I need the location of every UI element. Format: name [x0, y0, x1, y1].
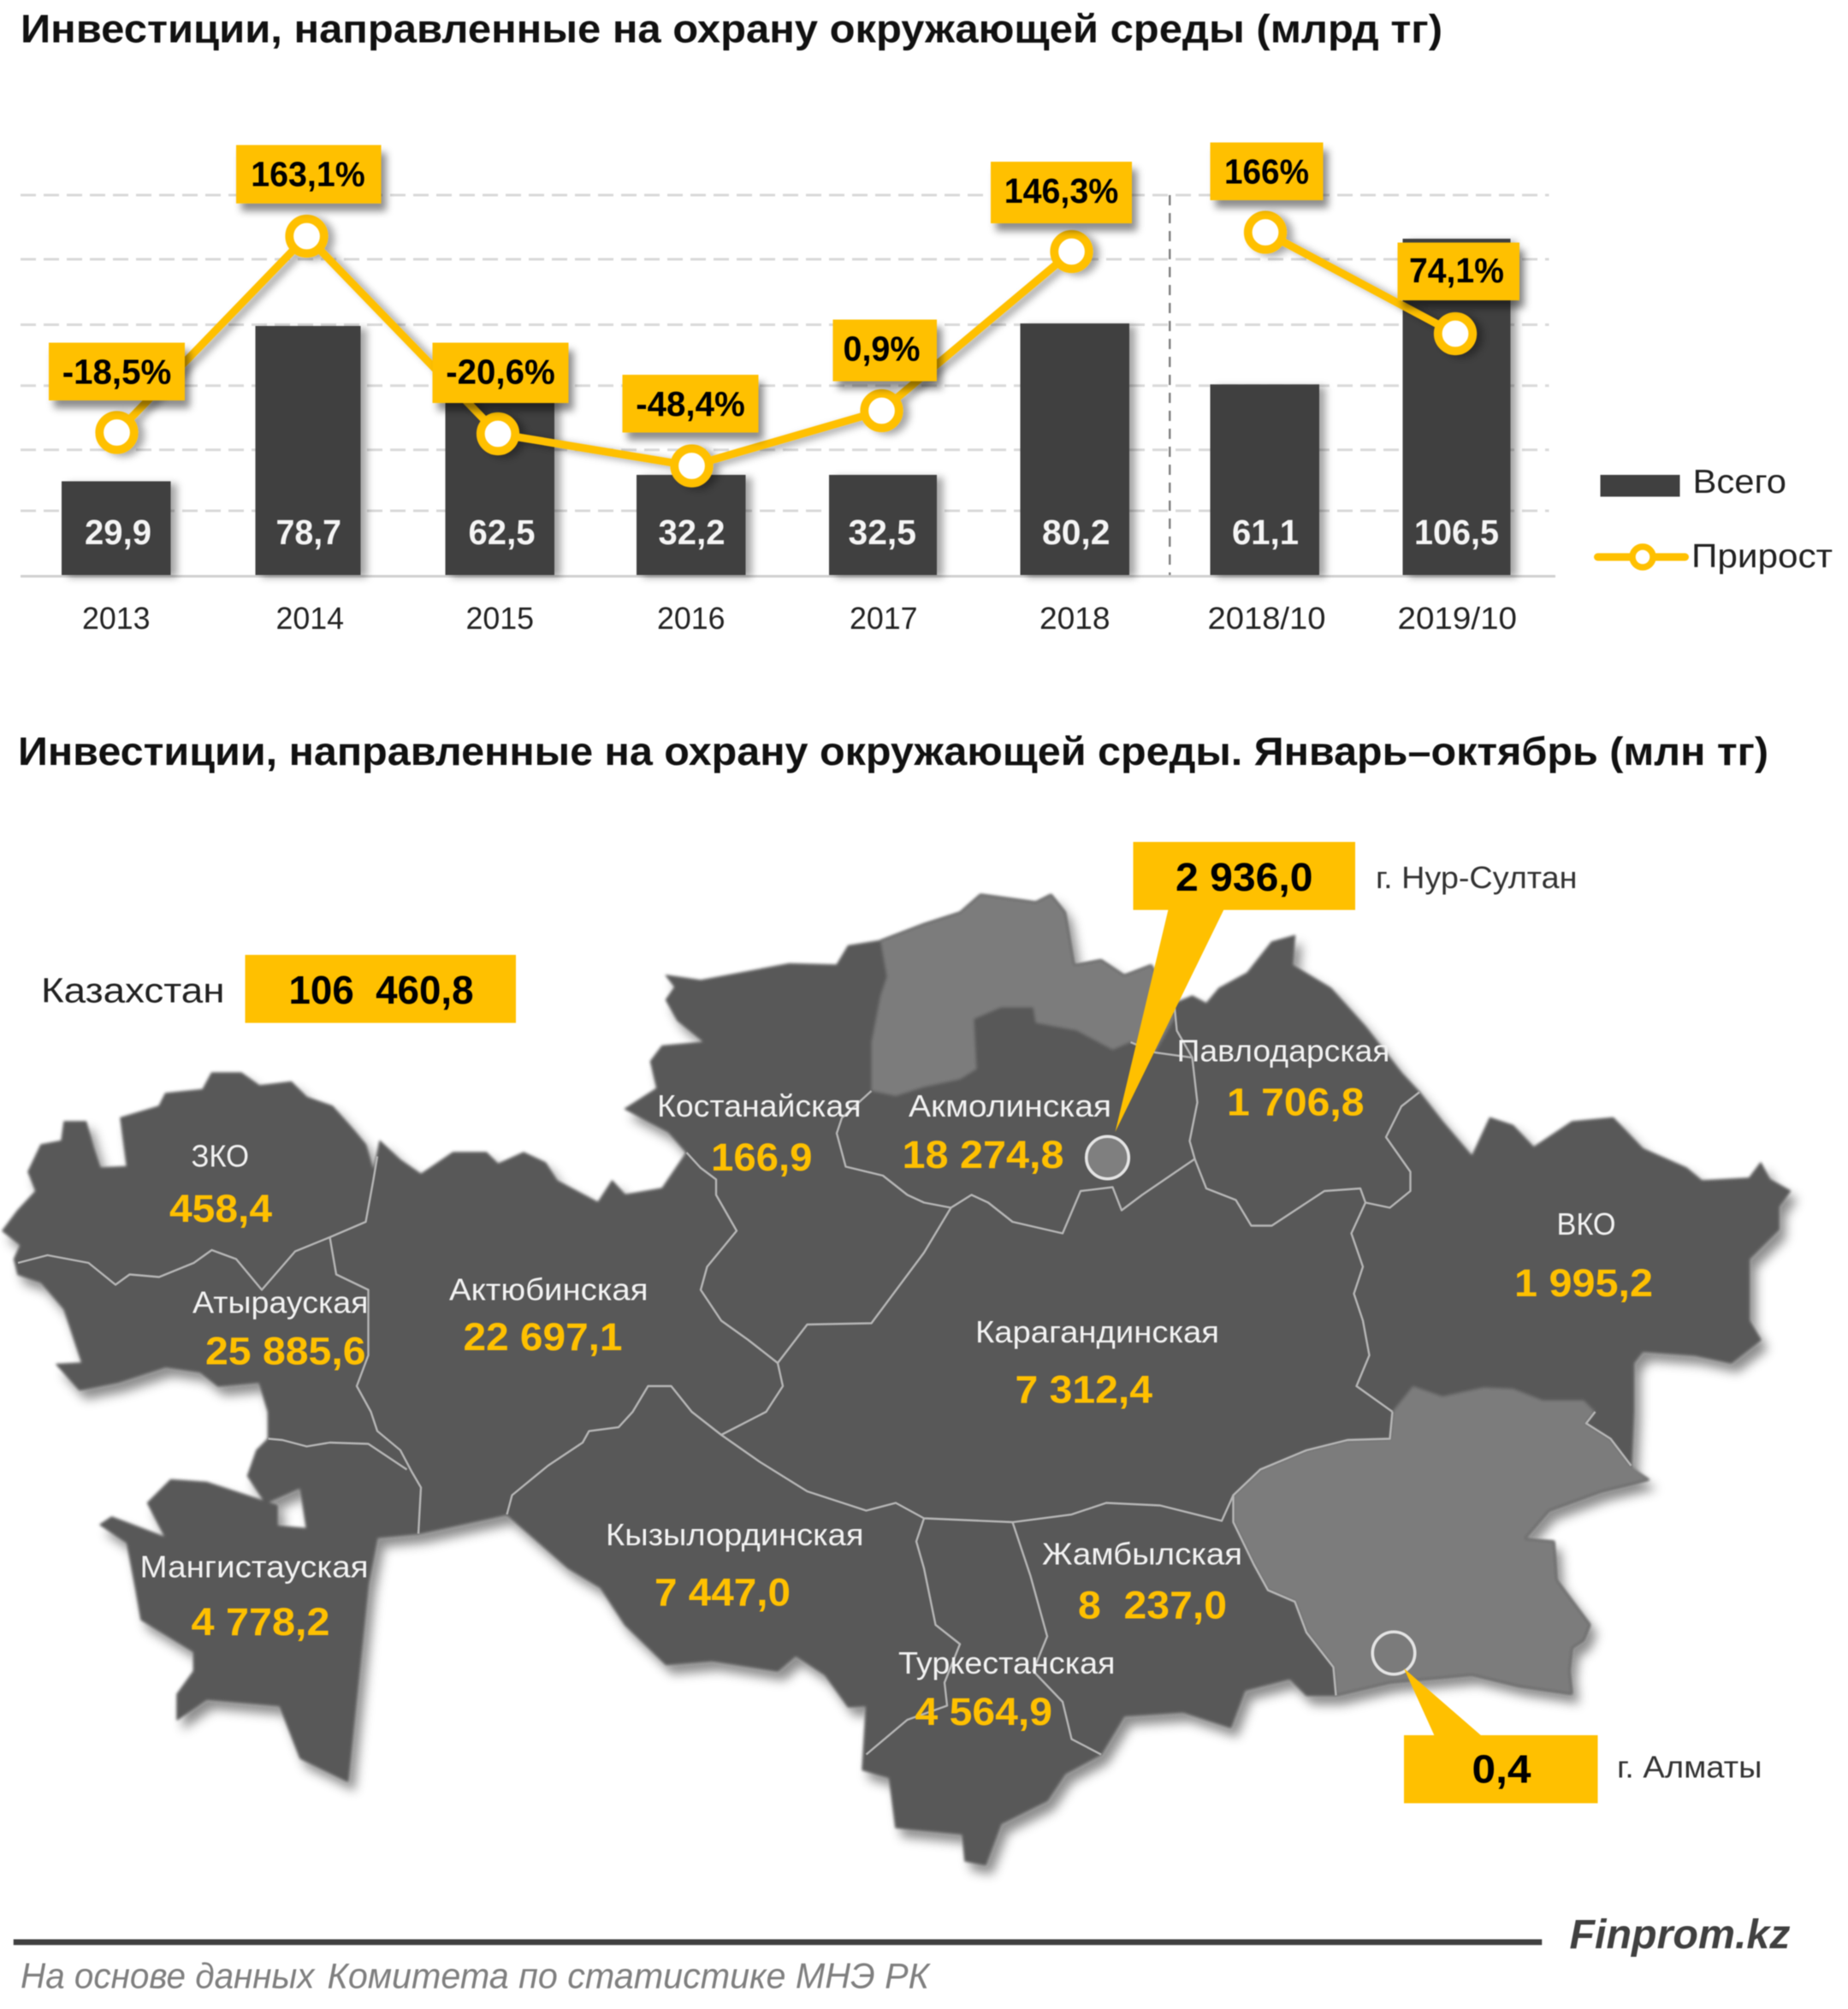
bar value labels: 61,1	[1232, 513, 1299, 552]
region label: Павлодарская	[1177, 1034, 1389, 1124]
bar value labels: 80,2	[1042, 513, 1111, 552]
region label: Кызылординская: Кызылординская	[606, 1517, 864, 1552]
bar value labels: 106,5	[1414, 513, 1499, 552]
region label: Карагандинская: 7 312,4	[1015, 1368, 1152, 1412]
region label: Атырауская	[192, 1285, 368, 1373]
map outline	[3, 895, 1790, 1865]
callout: Almaty	[1372, 1632, 1762, 1804]
region label: ВКО	[1514, 1206, 1653, 1305]
region label: ЗКО: 458,4	[169, 1187, 272, 1230]
region label: Мангистауская: 4 778,2	[192, 1600, 330, 1644]
x-axis year labels: 2018/10	[1208, 601, 1326, 636]
region label: ЗКО	[169, 1139, 272, 1230]
growth callouts: 166%	[1224, 152, 1309, 192]
region label: ЗКО: ЗКО	[192, 1139, 249, 1174]
growth line with markers	[99, 215, 1472, 483]
bar value labels	[85, 513, 1499, 552]
x-axis year labels: 2019/10	[1398, 601, 1517, 636]
growth callouts: 146,3%	[1004, 171, 1118, 210]
region label: Жамбылская: 8 237,0	[1078, 1584, 1227, 1627]
region label: Кызылординская	[606, 1517, 864, 1615]
callout: Nur-Sultan: 2 936,0	[1176, 855, 1312, 899]
title: bar chart heading: Инвестиции, направленные на охрану окружающей среды (млрд тг)	[21, 7, 1442, 51]
growth callouts	[49, 143, 1519, 433]
region label: Акмолинская: 18 274,8	[902, 1133, 1064, 1176]
bar value labels: 62,5	[469, 513, 536, 552]
callout: Kazakhstan total: Казахстан	[41, 971, 224, 1010]
source note: На основе данных	[21, 1956, 316, 1996]
title: map heading: Инвестиции, направленные на охрану окружающей среды. Январь–октябрь (млн тг)	[18, 729, 1768, 773]
bar value labels: 32,5	[849, 513, 916, 552]
legend: Всего	[1692, 464, 1786, 501]
source note	[21, 1956, 931, 1996]
brand: Finprom.kz: Finprom.kz	[1569, 1912, 1790, 1958]
region label: Карагандинская: Карагандинская	[975, 1314, 1219, 1349]
x-axis year labels	[82, 601, 1517, 636]
region label: Туркестанская: 4 564,9	[915, 1690, 1052, 1733]
region label: Жамбылская	[1042, 1537, 1242, 1627]
region label: Костанайская: 166,9	[711, 1135, 813, 1179]
region label: Павлодарская: 1 706,8	[1227, 1081, 1364, 1124]
region label: Актюбинская: 22 697,1	[464, 1315, 623, 1359]
region label: Актюбинская: Актюбинская	[449, 1272, 649, 1307]
region label: Костанайская	[657, 1088, 861, 1179]
growth callouts: -48,4%	[636, 384, 745, 424]
region label: Актюбинская	[449, 1272, 649, 1359]
region label: Атырауская: Атырауская	[192, 1285, 368, 1320]
region label: ВКО: ВКО	[1557, 1206, 1615, 1242]
region label: Кызылординская: 7 447,0	[654, 1571, 791, 1615]
growth callouts: 74,1%	[1409, 251, 1504, 290]
growth callouts: 0,9%	[844, 329, 921, 369]
region: North Kazakhstan (highlighted)	[871, 895, 1174, 1096]
callout: Kazakhstan total	[41, 955, 516, 1023]
x-axis year labels: 2015	[465, 601, 534, 636]
legend	[1598, 464, 1833, 575]
callout: Kazakhstan total: 106 460,8	[289, 968, 474, 1012]
region label: Мангистауская	[140, 1550, 368, 1644]
region label: Туркестанская	[898, 1645, 1116, 1733]
source note: Комитета по статистике МНЭ РК	[327, 1956, 931, 1996]
legend: Прирост	[1691, 538, 1833, 575]
region label: Костанайская: Костанайская	[657, 1088, 861, 1123]
region label: Жамбылская: Жамбылская	[1042, 1537, 1242, 1572]
footer rule	[14, 1940, 1542, 1945]
region: Almaty (highlighted)	[1234, 1386, 1650, 1696]
region label: Акмолинская	[902, 1088, 1111, 1176]
bar value labels: 78,7	[275, 513, 341, 552]
x-axis year labels: 2016	[657, 601, 726, 636]
growth callouts: -20,6%	[446, 353, 555, 392]
bar value labels: 32,2	[659, 513, 726, 552]
callout: Almaty: г. Алматы	[1617, 1750, 1762, 1785]
region label: Акмолинская: Акмолинская	[909, 1088, 1111, 1123]
callout: Nur-Sultan	[1087, 842, 1578, 1179]
region label: Мангистауская: Мангистауская	[140, 1550, 368, 1585]
map of Kazakhstan regions	[3, 895, 1790, 1865]
bar value labels: 29,9	[85, 513, 151, 552]
callout: Nur-Sultan: г. Нур-Султан	[1376, 860, 1578, 895]
region label: ВКО: 1 995,2	[1514, 1261, 1653, 1305]
x-axis year labels: 2013	[82, 601, 151, 636]
x-axis year labels: 2017	[850, 601, 917, 636]
chart: investments by year with growth line	[21, 143, 1555, 636]
region label: Павлодарская: Павлодарская	[1177, 1034, 1389, 1069]
region label: Карагандинская	[975, 1314, 1219, 1412]
region label: Туркестанская: Туркестанская	[898, 1645, 1116, 1680]
x-axis year labels: 2014	[275, 601, 344, 636]
growth callouts: -18,5%	[62, 353, 171, 392]
x-axis year labels: 2018	[1040, 601, 1111, 636]
region label: Атырауская: 25 885,6	[205, 1330, 366, 1373]
callout: Almaty: 0,4	[1472, 1747, 1531, 1792]
bars: total investments	[62, 239, 1511, 575]
growth callouts: 163,1%	[251, 155, 365, 194]
